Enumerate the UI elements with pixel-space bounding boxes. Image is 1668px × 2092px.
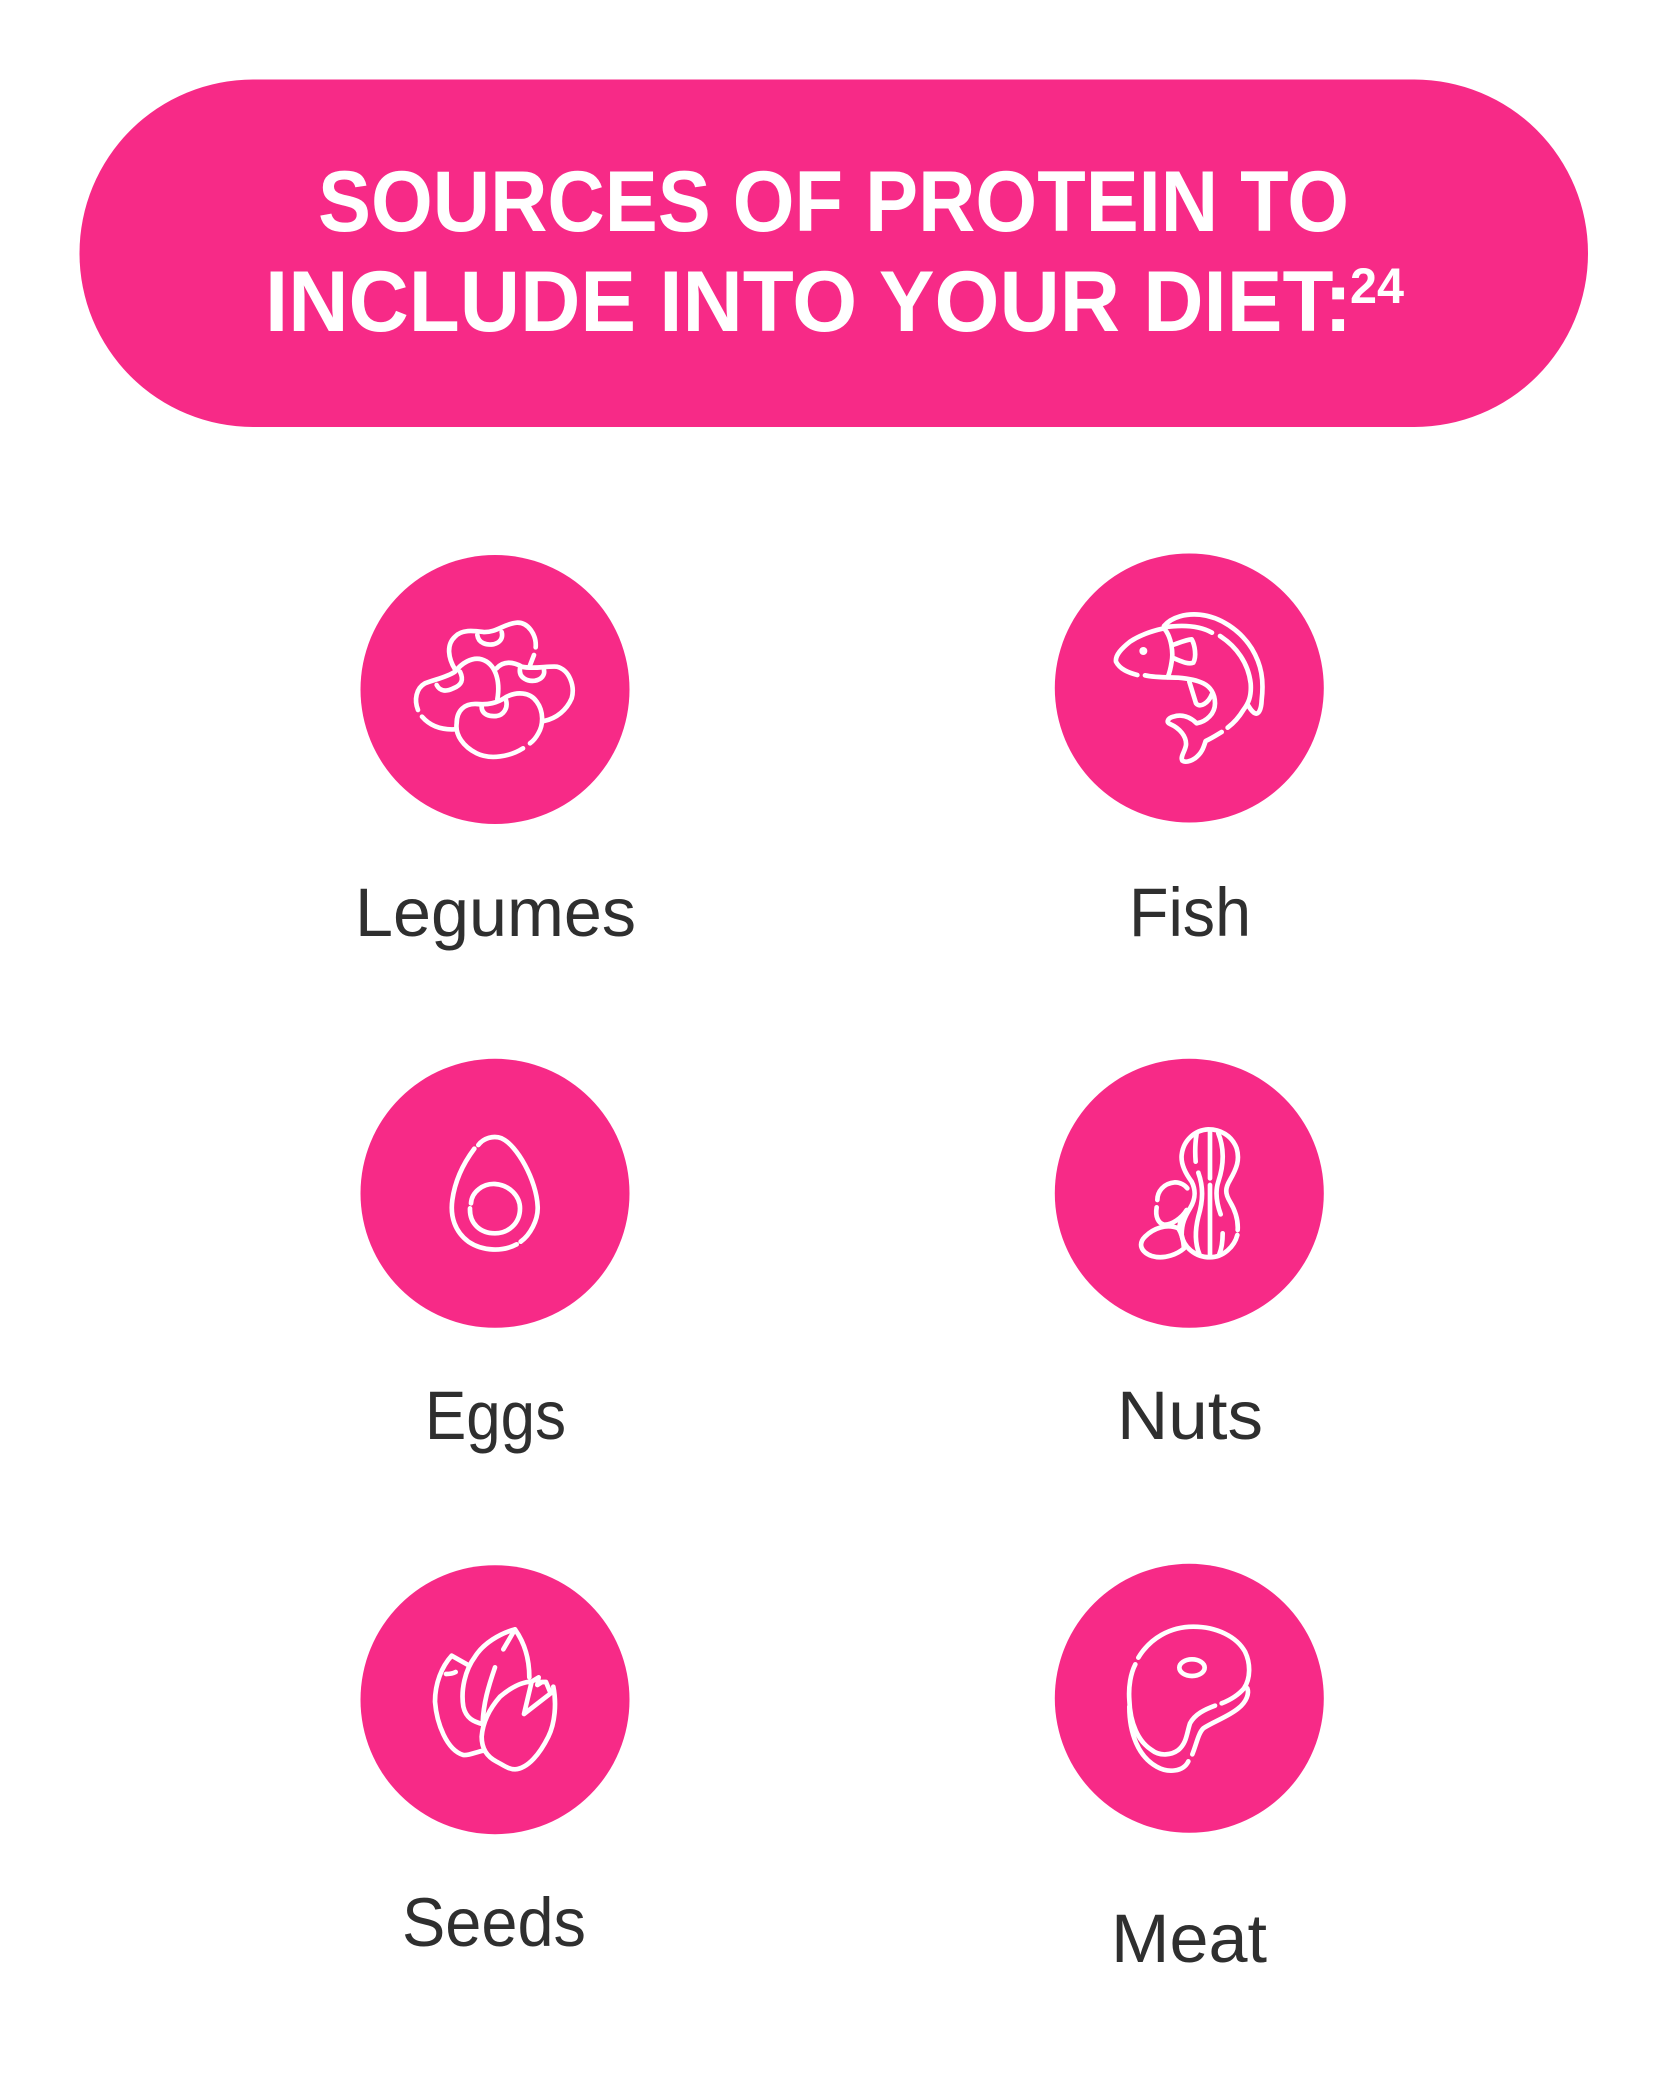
item: eggs (360, 1059, 630, 1454)
label: Fish: Fish (1129, 874, 1251, 951)
label: Legumes: Legumes (355, 874, 636, 951)
item: meat (1055, 1564, 1324, 1977)
label: Nuts: Nuts (1117, 1377, 1263, 1454)
title text (265, 154, 1404, 350)
label: Eggs: Eggs (425, 1377, 566, 1454)
item: fish (1055, 554, 1324, 951)
icon: meat (1055, 1564, 1324, 1833)
icon: egg (360, 1059, 630, 1328)
label: Seeds: Seeds (402, 1884, 586, 1961)
item: seeds (360, 1565, 630, 1961)
item: nuts (1055, 1059, 1324, 1454)
title banner (80, 80, 1588, 427)
item: legumes (355, 555, 636, 951)
icon: legumes (360, 555, 630, 824)
label: Meat: Meat (1111, 1900, 1267, 1977)
title text: INCLUDE INTO YOUR DIET: (265, 254, 1352, 350)
icon: fish (1055, 554, 1324, 822)
title text: 24 (1350, 258, 1404, 314)
icon: nuts (1055, 1059, 1324, 1328)
title text: SOURCES OF PROTEIN TO (318, 154, 1349, 250)
icon: seeds (360, 1565, 630, 1834)
